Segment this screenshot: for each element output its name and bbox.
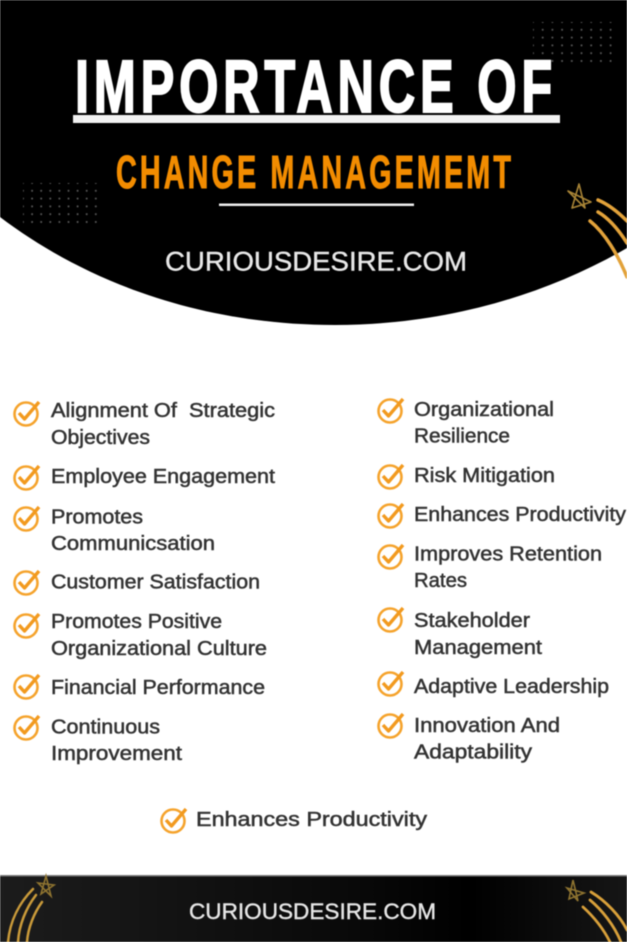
item: culture: Promotes Positive (51, 611, 222, 633)
panel: left checklist (14, 400, 275, 765)
item: leadership: Adaptive Leadership (414, 676, 609, 698)
item: customer: Customer Satisfaction (51, 572, 260, 594)
item: bottom centred: Enhances Productivity (196, 809, 427, 831)
item: retention: Rates (414, 570, 467, 592)
item: leadership (378, 672, 609, 698)
item: resilience: Resilience (414, 426, 510, 448)
item: stakeholder: Management (414, 637, 542, 659)
item: resilience (378, 399, 554, 448)
icon: shooting star top (568, 184, 627, 277)
item: improvement: Continuous (51, 716, 160, 738)
item: innovation: Innovation And (414, 715, 560, 737)
item: communication: Promotes (51, 506, 143, 528)
item: innovation (378, 714, 560, 764)
item: bottom centred (162, 809, 427, 832)
item: alignment: Alignment Of Strategic (51, 400, 275, 422)
subtitle divider (219, 204, 414, 206)
website label: CURIOUSDESIRE.COM (165, 246, 467, 276)
item: alignment (14, 400, 275, 449)
item: retention: Improves Retention (414, 544, 602, 566)
item: culture: Organizational Culture (51, 638, 267, 660)
item: employee: Employee Engagement (51, 466, 275, 488)
decorative dots top right (533, 22, 613, 67)
decorative dots left (23, 183, 98, 224)
item: alignment: Objectives (51, 427, 150, 449)
item: risk: Risk Mitigation (414, 465, 555, 487)
item: resilience: Organizational (414, 399, 554, 421)
item: communication (14, 506, 215, 555)
item: improvement: Improvement (51, 743, 182, 765)
item: culture (14, 611, 267, 660)
panel: black header (0, 0, 627, 325)
item: communication: Communicsation (51, 533, 215, 555)
icon: shooting star left (8, 876, 54, 942)
website label: CURIOUSDESIRE.COM (189, 899, 436, 924)
item: retention (378, 544, 602, 592)
item: productivity: Enhances Productivity (414, 504, 626, 526)
panel: footer (0, 875, 627, 942)
panel: right checklist (378, 399, 626, 764)
item: stakeholder: Stakeholder (414, 610, 530, 632)
item: improvement (14, 716, 182, 765)
title underline (73, 115, 560, 123)
item: stakeholder (378, 608, 542, 659)
item: innovation: Adaptability (414, 742, 532, 764)
icon: shooting star right (567, 880, 627, 942)
item: financial: Financial Performance (51, 677, 265, 699)
item: risk (378, 465, 555, 488)
